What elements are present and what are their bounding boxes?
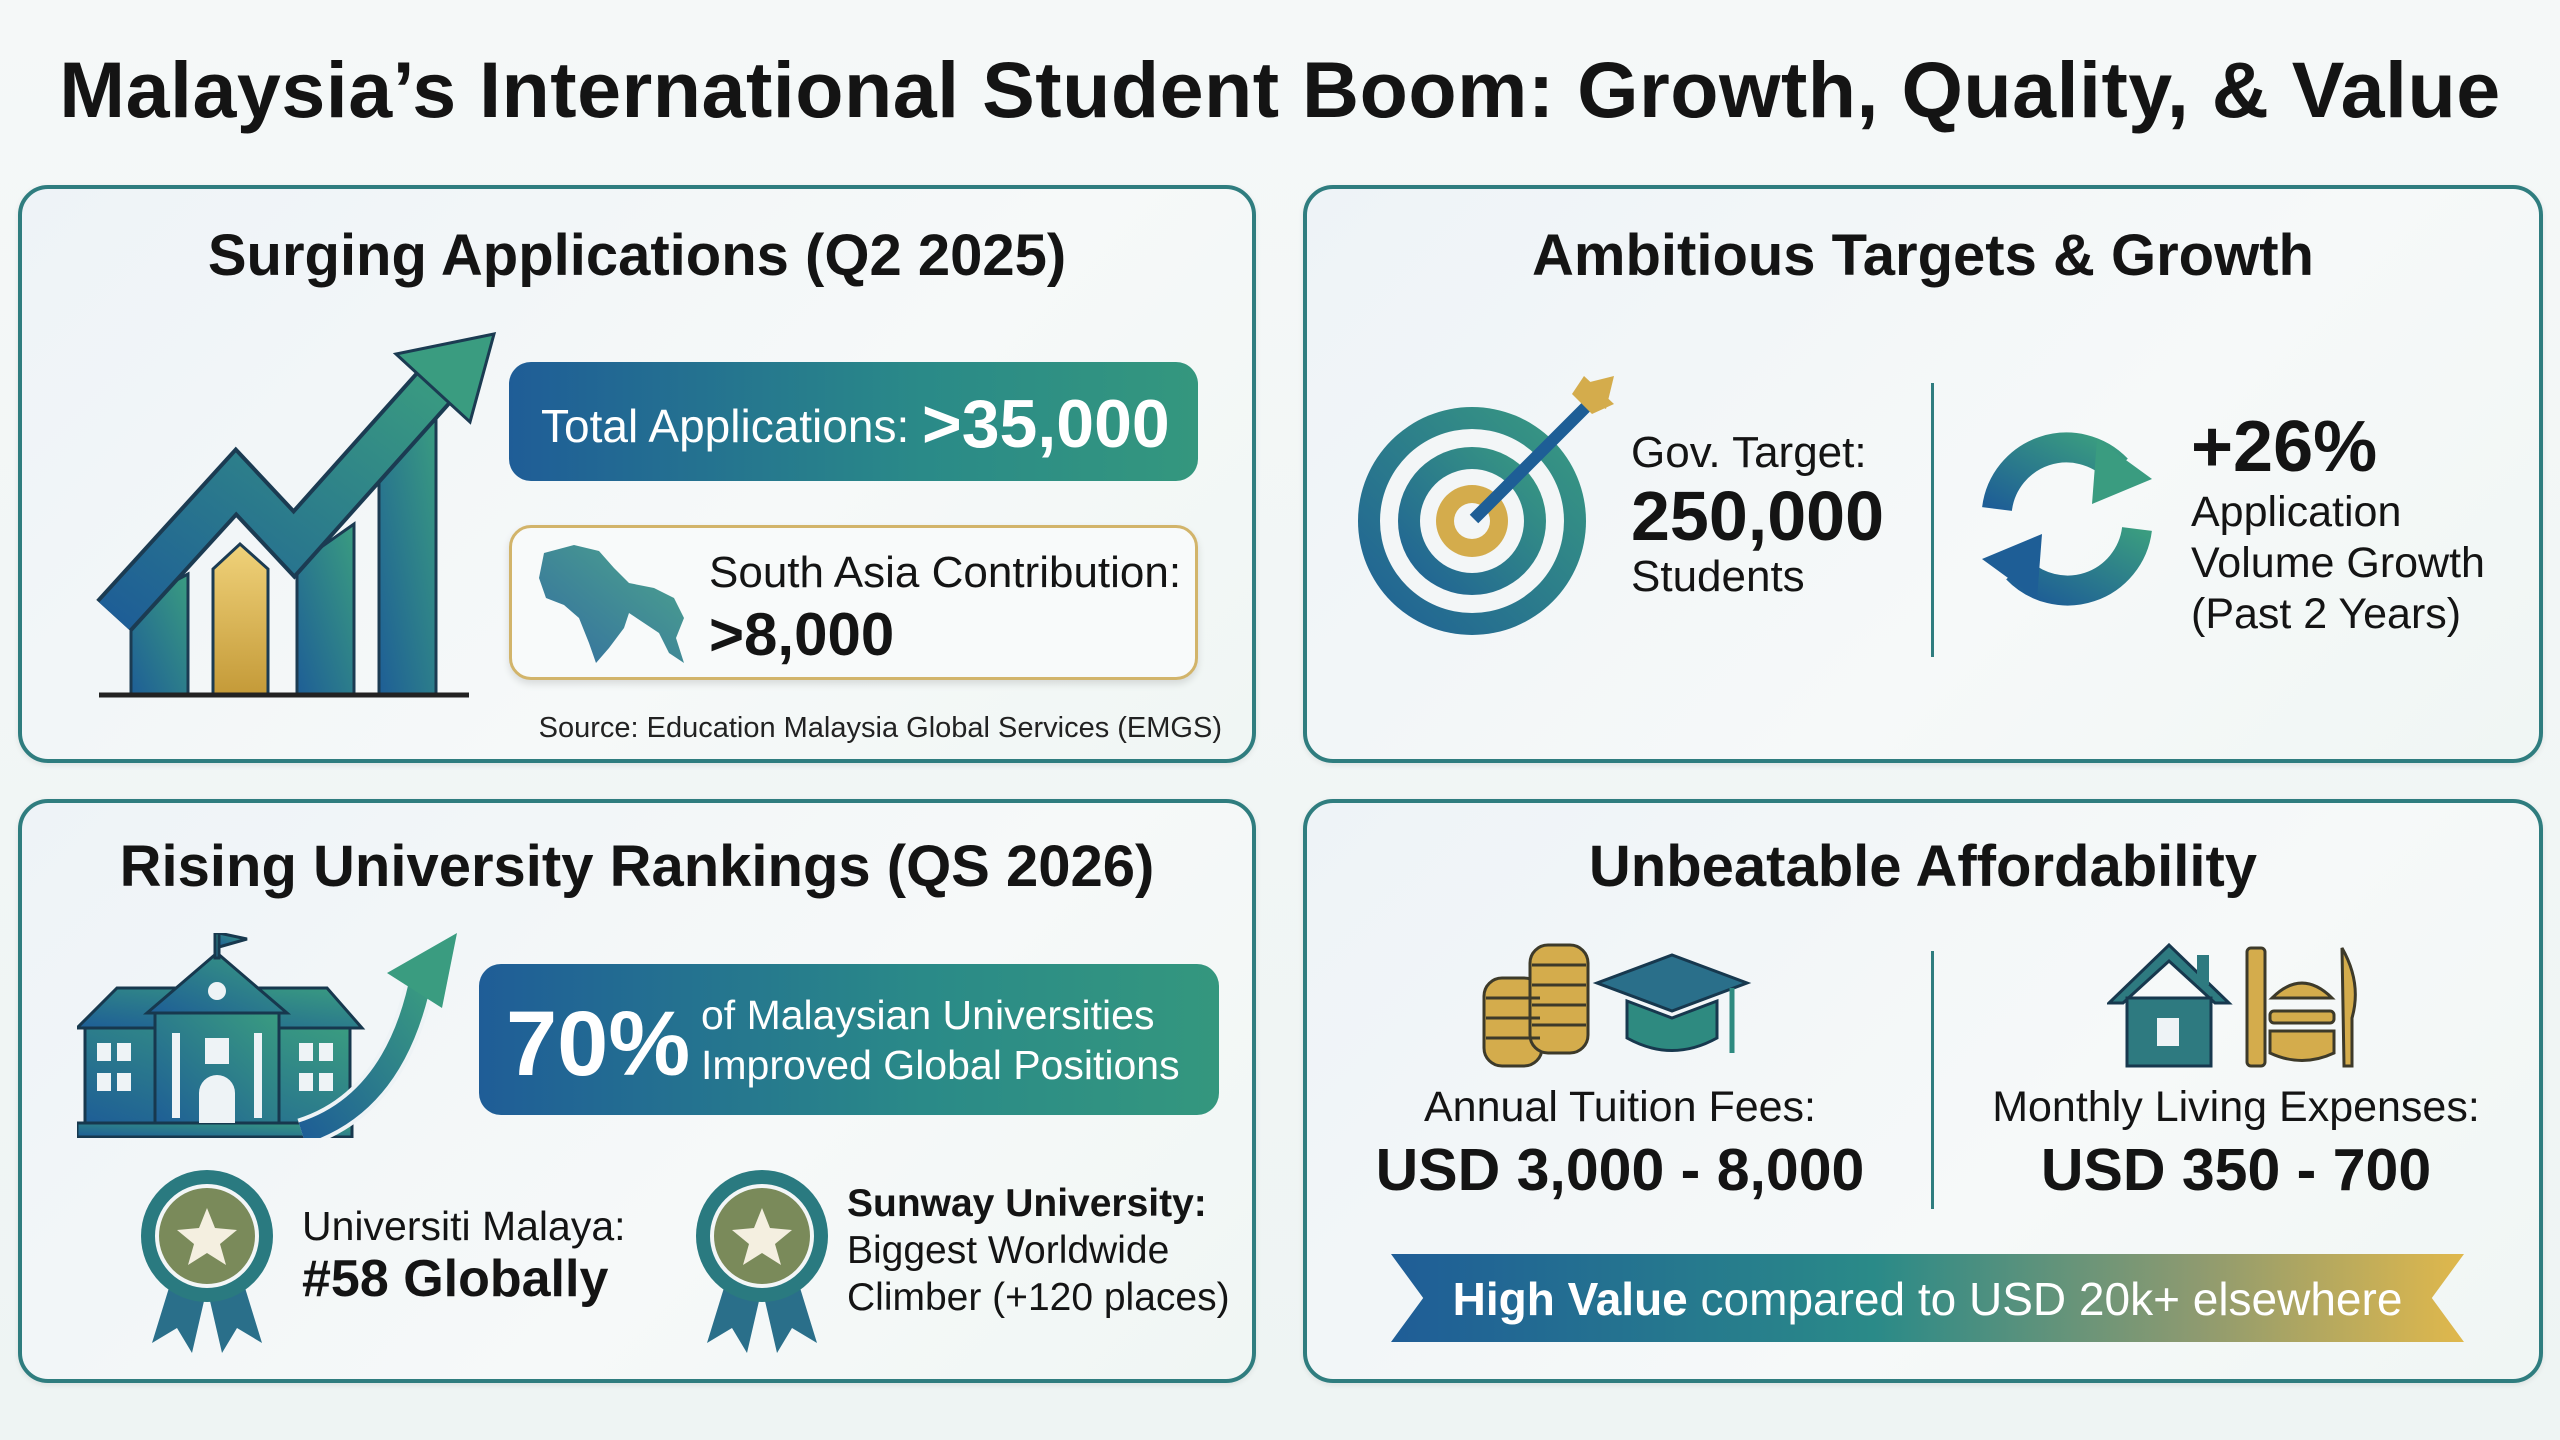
text: gov target: Gov. Target: (1631, 428, 1867, 477)
panel: surging applications (18, 185, 1256, 763)
callout: south asia (509, 525, 1198, 680)
text: living: Monthly Living Expenses: (1992, 1083, 2480, 1131)
icon: target (1358, 376, 1614, 635)
panel: affordability (1303, 799, 2543, 1383)
text: tuition: Annual Tuition Fees: (1424, 1083, 1816, 1131)
heading: Rising University Rankings (QS 2026) (120, 834, 1154, 899)
source text: Source: Education Malaysia Global Services (EMGS) (539, 712, 1222, 744)
text: growth: Volume Growth (2191, 539, 2485, 587)
text: growth (2191, 407, 2485, 638)
text: growth: (Past 2 Years) (2191, 590, 2461, 638)
text: tuition (1376, 1083, 1864, 1203)
ribbon banner: High Value compared to USD 20k+ elsewhere (1453, 1273, 2402, 1325)
callout: total applications: Total Applications: >35,000 (541, 386, 1170, 462)
divider (1931, 951, 1934, 1209)
heading: Unbeatable Affordability (1589, 834, 2257, 899)
callout: south asia: South Asia Contribution: (709, 548, 1181, 597)
icon: medal (141, 1170, 273, 1353)
callout: total applications (509, 362, 1198, 481)
medal: sunway (696, 1170, 1230, 1353)
heading: Ambitious Targets & Growth (1532, 223, 2314, 288)
text: living (1992, 1083, 2480, 1203)
text (847, 1182, 1230, 1319)
text: Biggest Worldwide (847, 1229, 1169, 1272)
icon: cycle arrows (1982, 432, 2152, 606)
text (302, 1203, 626, 1308)
ribbon banner (1391, 1254, 2464, 1342)
callout: 70% (479, 964, 1219, 1115)
text: tuition: USD 3,000 - 8,000 (1376, 1137, 1864, 1203)
icon: university building (77, 933, 457, 1138)
callout: 70%: of Malaysian Universities (701, 992, 1154, 1038)
text: Sunway University: (847, 1182, 1207, 1225)
callout: 70%: Improved Global Positions (701, 1042, 1180, 1088)
medal: universiti malaya (141, 1170, 626, 1353)
panel: rankings (18, 799, 1256, 1383)
icon: house and food (2107, 943, 2357, 1068)
icon: growth chart (96, 332, 496, 698)
icon: medal (696, 1170, 828, 1353)
title: Malaysia’s International Student Boom: Growth, Quality, & Value (59, 45, 2501, 134)
icon: coins and cap (1482, 944, 1752, 1068)
callout: south asia: >8,000 (709, 601, 894, 668)
text: gov target (1631, 428, 1884, 601)
text: growth: +26% (2191, 407, 2377, 487)
icon: south asia map (539, 545, 684, 663)
text: gov target: 250,000 (1631, 477, 1884, 555)
text: growth: Application (2191, 488, 2401, 536)
text: #58 Globally (302, 1250, 608, 1308)
heading: Surging Applications (Q2 2025) (208, 223, 1066, 288)
text: Universiti Malaya: (302, 1203, 626, 1249)
text: Climber (+120 places) (847, 1276, 1230, 1319)
callout: 70%: 70% (506, 993, 690, 1095)
divider (1931, 383, 1934, 657)
text: gov target: Students (1631, 552, 1805, 601)
text: living: USD 350 - 700 (2041, 1137, 2431, 1203)
panel: ambitious targets (1303, 185, 2543, 763)
